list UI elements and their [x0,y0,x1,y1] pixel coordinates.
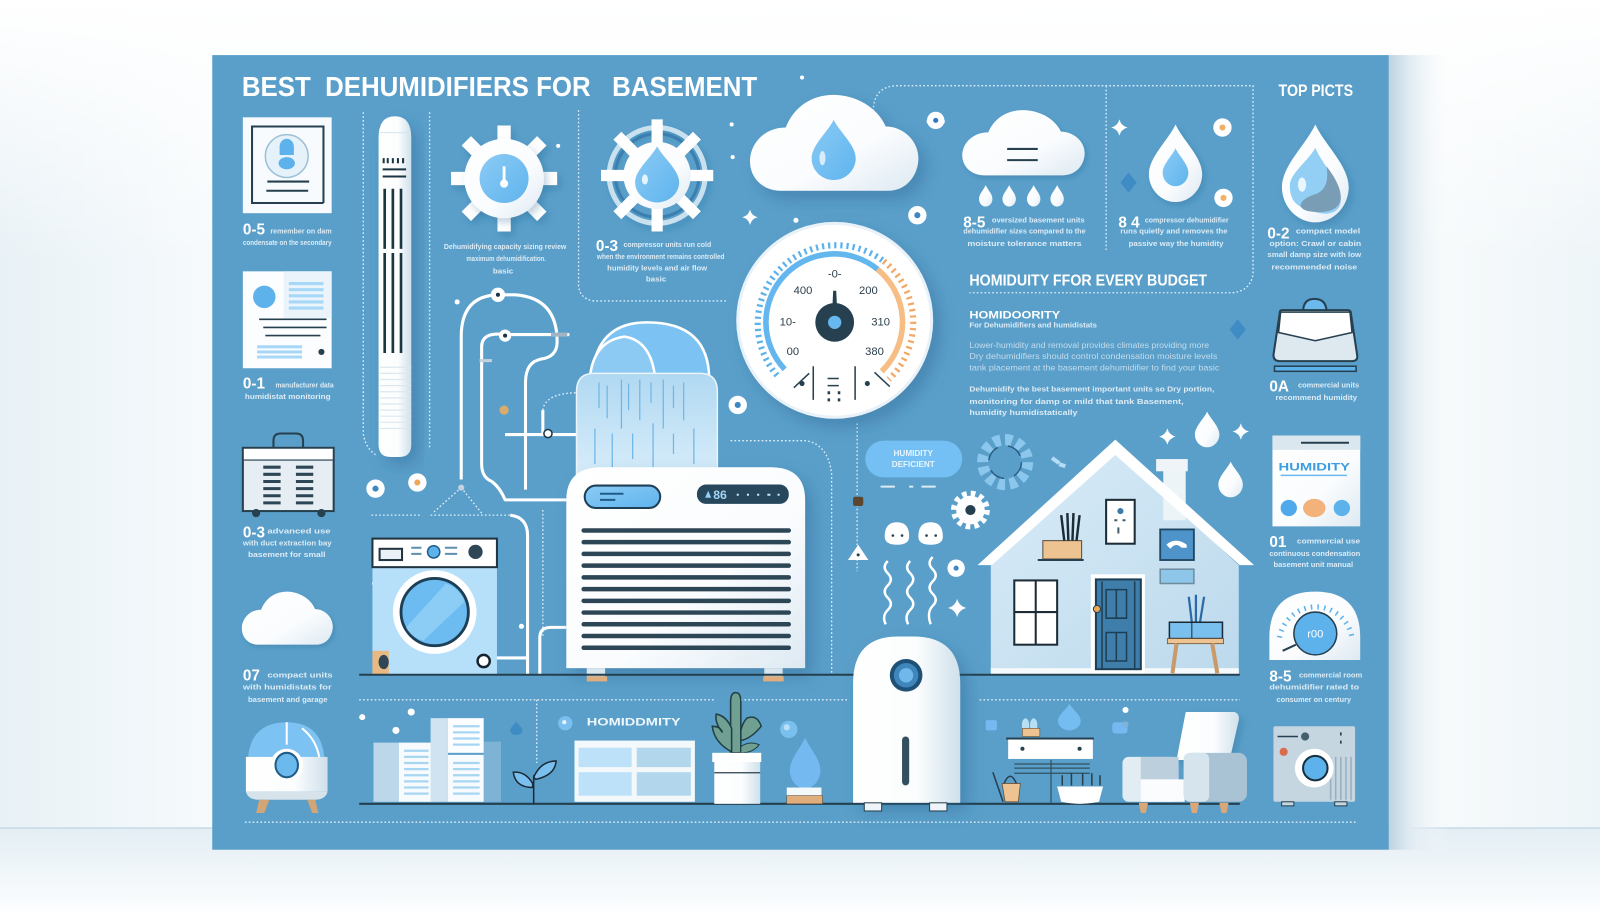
humidity label: HOMIDDMITY [587,716,681,728]
gear 2 caption: when the environment remains controlled [596,252,725,261]
white drop caption: compressor dehumidifier [1145,215,1229,224]
gear 2 caption: humidity levels and air flow [607,263,707,272]
subheading and description: For Dehumidifiers and humidistats [969,320,1097,329]
white drop caption: passive way the humidity [1129,239,1224,248]
humidity gauge [738,223,932,417]
decorative diamond [1230,319,1246,340]
gear 1 caption [444,242,566,275]
blue display pill [585,486,660,508]
gear 1 caption: maximum dehumidification. [466,254,546,263]
button pill label [865,441,962,487]
briefcase icon: commercial units [1298,381,1359,390]
half dial card: dehumidifier rated to [1269,683,1360,692]
vent grille [584,530,789,648]
subheading and description: Lower-humidity and removal provides climates providing more [969,341,1210,350]
gauge numbers: 200 [859,285,878,297]
budget heading: HOMIDUITY FFOR EVERY BUDGET [969,273,1208,290]
gear 1 caption: basic [493,266,514,275]
left column item 4: cloud: basement and garage [248,695,328,704]
half dial card [1269,592,1362,704]
rain cloud caption: moisture tolerance matters [967,239,1082,248]
bowl [1057,773,1103,804]
report card: humidity: 01 [1269,534,1287,551]
main blue panel [212,55,1389,850]
big drop top pick: 0-2 [1267,226,1289,243]
gauge numbers [780,268,890,358]
briefcase icon [1269,299,1359,402]
left column item 2: report: 0-1 [243,376,265,393]
big drop top pick: option: Crawl or cabin [1269,239,1362,248]
wall picture [1106,500,1135,544]
button pill label: DEFICIENT [892,460,935,469]
rain cloud caption [963,214,1086,248]
shelf floor line 2 [359,803,1240,805]
window panel [574,741,695,802]
gear 1 caption: Dehumidifying capacity sizing review [444,242,566,251]
button pill label: HUMIDITY [894,449,934,458]
subheading and description: tank placement at the basement dehumidifier to find your basic [969,363,1219,372]
white drop [1111,118,1233,207]
dotted guide lines [245,86,1357,822]
subheading and description: Dehumidify the best basement important units so Dry portion, [969,385,1214,394]
big drop top pick: small damp size with low [1267,250,1361,259]
left column item 3: filter basket [242,434,334,559]
small droplet badge [927,112,945,129]
flame shaped water drop [780,721,822,804]
left column item 2: report [243,271,334,401]
side table with plant [1167,595,1223,673]
heading: top picks: TOP PICTS [1279,82,1353,100]
gauge numbers: 380 [865,346,884,358]
briefcase icon: recommend humidity [1276,393,1358,402]
title: BEST DEHUMIDIFIERS FOR BASEMENT [242,71,757,102]
half dial card: r00 [1307,629,1323,641]
subheading and description: monitoring for damp or mild that tank Basement, [969,397,1184,406]
washing machine [372,539,497,674]
water tank with rain [577,322,717,479]
left column item 1: document [243,117,332,247]
left column item 1: document: condensate on the secondary [243,238,332,247]
gear 2 caption: 0-3 [596,238,618,255]
broken blue gear [983,440,1065,485]
left column item 4: cloud [242,592,333,704]
shelf floor line 1 [359,674,1240,676]
small rain cloud [962,110,1085,207]
left column item 3: filter basket: basement for small [248,550,326,559]
humidity label [558,716,681,730]
tall filter tube [379,116,411,457]
briefcase icon: 0A [1269,379,1289,396]
house door [1091,574,1145,674]
rain cloud caption: 8-5 [963,214,986,231]
gear with water drop [601,119,713,232]
big cloud with drop [750,95,918,191]
tower dehumidifier [853,637,960,811]
white drop caption: runs quietly and removes the [1120,227,1228,236]
wall shelf with books [1038,513,1084,560]
gauge numbers: 400 [794,285,812,297]
console table decor [986,704,1129,804]
sprout [513,761,556,804]
dark digital readout: 86 [713,488,727,502]
house [978,440,1254,674]
rain cloud caption: dehumidifier sizes compared to the [963,227,1086,236]
gauge needle knob [815,291,854,342]
small white gear [954,494,987,526]
subheading and description [969,309,1219,417]
smiling blobs [885,522,943,545]
gauge numbers: 310 [871,316,890,328]
gear 2 caption: compressor units run cold [623,240,712,249]
gauge numbers: -0- [828,268,842,280]
rain cloud caption: oversized basement units [992,215,1085,224]
pipe valves and nodes [366,75,927,629]
subheading and description: HOMIDOORITY [969,309,1061,321]
gauge numbers: 00 [787,346,799,358]
half dial card: consumer on century [1277,695,1352,704]
left column item 2: report: humidistat monitoring [245,392,331,401]
big drop top pick: recommended noise [1271,262,1357,271]
small washer appliance [1273,726,1355,806]
dark digital readout [697,485,789,504]
left column item 3: filter basket: advanced use [267,527,331,536]
tube vent slots [383,158,406,353]
report card: humidity: continuous condensation [1269,549,1361,558]
left column item 2: report: manufacturer data [276,381,334,390]
gear 2 caption [596,238,725,284]
subheading and description: Dry dehumidifiers should control condensation moisture levels [969,352,1217,361]
big drop top pick: compact model [1296,227,1360,236]
left column item 4: cloud: 07 [243,667,260,684]
gauge numbers: 10- [780,316,796,328]
report card: humidity: commercial use [1297,537,1360,546]
potted plant [712,693,761,804]
report card: humidity: basement unit manual [1273,560,1353,569]
half dial card: 8-5 [1269,668,1292,685]
chimney [1156,459,1188,520]
framed blue picture [1160,529,1194,583]
left column item 3: filter basket: with duct extraction bay [242,539,332,548]
gear 2 caption: basic [646,275,667,284]
stacked documents buildings [359,708,522,802]
big drop top pick [1267,124,1362,271]
report card: humidity [1269,436,1361,569]
small badges [848,412,1249,617]
basket [993,772,1020,802]
main dehumidifier unit [566,467,805,681]
left column item 3: filter basket: 0-3 [243,525,265,542]
house window [1014,580,1057,645]
half dial card: commercial room [1299,670,1362,679]
report card: humidity: HUMIDITY [1279,461,1351,473]
white drop caption [1118,214,1229,248]
subheading and description: humidity humidistatically [969,408,1078,417]
white drop caption: 8 4 [1118,214,1140,231]
rising vapor lines [884,557,936,624]
left column item 4: cloud: compact units [267,670,333,679]
left column item 1: document: remember on dam [270,227,332,236]
left column item 1: document: 0-5 [243,222,265,239]
left column item 5: dome device [246,722,328,813]
armchair [1122,712,1247,813]
pipes [461,295,577,674]
left column item 4: cloud: with humidistats for [242,683,332,692]
gear with thermometer dial [451,125,557,232]
